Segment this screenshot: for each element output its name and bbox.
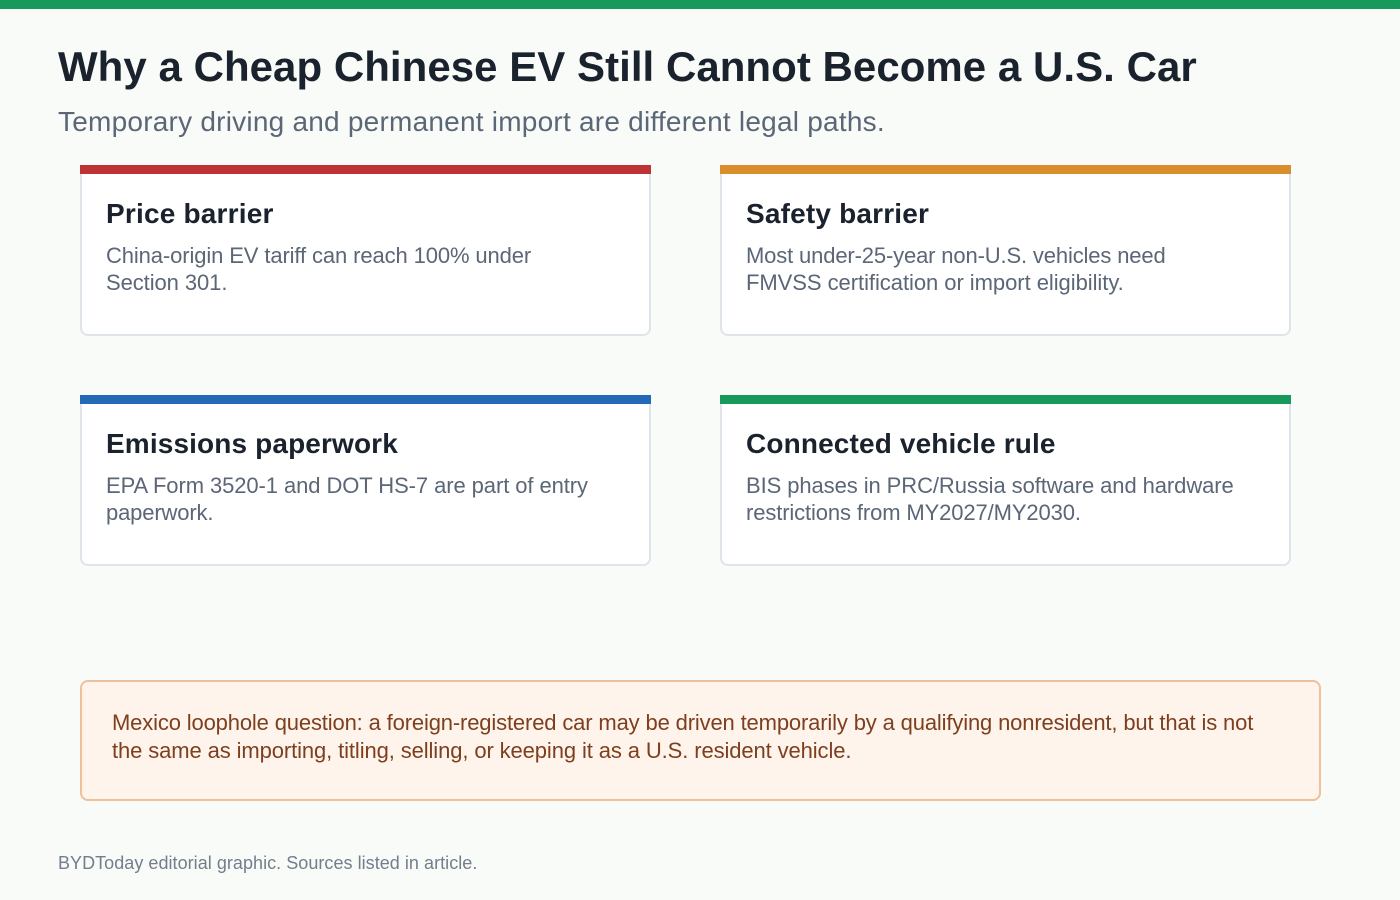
callout text: Mexico loophole question: a foreign-registered car may be driven temporarily by a qualifying nonresident, but that is not xyxy=(112,710,1253,735)
text: connected vehicle rule: restrictions from MY2027/MY2030. xyxy=(746,500,1081,525)
text: price barrier: Section 301. xyxy=(106,270,227,295)
text: emissions paperwork xyxy=(106,473,588,525)
text: emissions paperwork: EPA Form 3520-1 and DOT HS-7 are part of entry xyxy=(106,473,588,498)
footer source note: BYDToday editorial graphic. Sources listed in article. xyxy=(58,853,477,873)
callout text: the same as importing, titling, selling, or keeping it as a U.S. resident vehicle. xyxy=(112,738,851,763)
text: connected vehicle rule: BIS phases in PRC/Russia software and hardware xyxy=(746,473,1234,498)
heading: connected vehicle rule: Connected vehicle rule xyxy=(746,428,1056,459)
text: price barrier xyxy=(106,243,531,295)
heading: safety barrier: Safety barrier xyxy=(746,198,929,229)
heading: emissions paperwork: Emissions paperwork xyxy=(106,428,398,459)
title: Why a Cheap Chinese EV Still Cannot Become a U.S. Car xyxy=(58,43,1197,90)
text: price barrier: China-origin EV tariff can reach 100% under xyxy=(106,243,531,268)
panel: emissions paperwork xyxy=(80,395,651,566)
text: safety barrier: Most under-25-year non-U.S. vehicles need xyxy=(746,243,1166,268)
callout text xyxy=(112,710,1254,763)
panel: safety barrier xyxy=(720,165,1291,336)
text: emissions paperwork: paperwork. xyxy=(106,500,213,525)
text: safety barrier: FMVSS certification or import eligibility. xyxy=(746,270,1124,295)
heading: price barrier: Price barrier xyxy=(106,198,274,229)
panel: price barrier xyxy=(80,165,651,336)
callout: Mexico loophole xyxy=(80,680,1321,801)
top accent bar xyxy=(0,0,1400,9)
panel: connected vehicle rule xyxy=(720,395,1291,566)
text: safety barrier xyxy=(746,243,1166,295)
subtitle: Temporary driving and permanent import are different legal paths. xyxy=(58,106,885,137)
text: connected vehicle rule xyxy=(746,473,1234,525)
